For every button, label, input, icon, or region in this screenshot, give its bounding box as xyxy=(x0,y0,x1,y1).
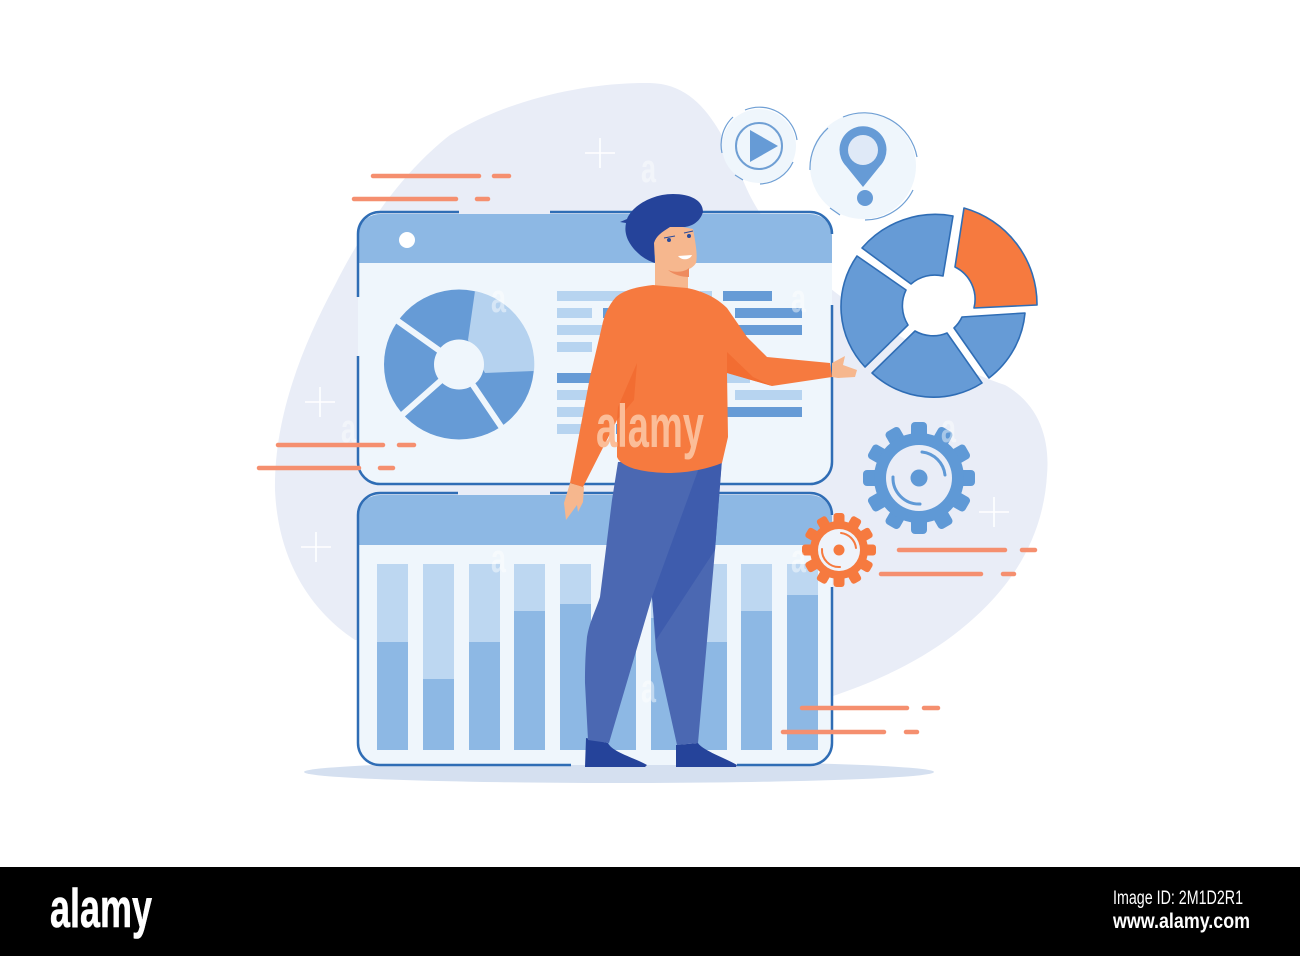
footer url: www.alamy.com xyxy=(1112,910,1250,933)
panel: upper dashboard window xyxy=(358,212,832,484)
watermark marks: a xyxy=(791,537,807,581)
segment: lower right xyxy=(954,313,1025,378)
chin shadow xyxy=(668,268,689,277)
chart: exploded donut xyxy=(841,208,1037,397)
window outline xyxy=(358,493,832,765)
left text rows xyxy=(557,291,636,434)
footer logo: alamy xyxy=(50,877,152,939)
trouser shade xyxy=(652,460,722,640)
hair xyxy=(620,194,703,263)
window body xyxy=(358,545,832,765)
watermark: centre alamy: alamy xyxy=(596,393,704,460)
watermark marks: a xyxy=(341,407,357,451)
left hand xyxy=(564,483,584,520)
ground shadow xyxy=(304,761,934,783)
segment: orange highlight xyxy=(955,208,1037,308)
footer image id: Image ID: 2M1D2R1 xyxy=(1113,888,1243,909)
icon: play button xyxy=(721,107,797,184)
watermark marks: a xyxy=(941,407,957,451)
segment: bottom xyxy=(872,331,982,397)
icon: large blue gear xyxy=(863,422,975,534)
window header xyxy=(358,495,832,545)
right hand xyxy=(832,356,857,378)
plus marks xyxy=(301,138,1009,562)
watermark marks: a xyxy=(491,537,507,581)
window dot xyxy=(399,232,415,248)
watermark marks: a xyxy=(791,277,807,321)
sweater shade xyxy=(617,352,772,420)
segment: top xyxy=(862,214,953,284)
neck xyxy=(655,255,688,290)
bar chart xyxy=(377,564,818,750)
eyes and smile xyxy=(664,231,693,259)
icon: small orange gear xyxy=(802,513,876,587)
speed lines: right xyxy=(881,550,1035,574)
right text rows xyxy=(700,291,802,417)
face xyxy=(653,225,697,272)
footer bar xyxy=(0,867,1300,956)
window body xyxy=(358,263,832,484)
watermark marks: a xyxy=(641,667,657,711)
sweater xyxy=(570,285,832,487)
segment: left xyxy=(841,256,908,367)
character: presenter xyxy=(564,194,857,767)
window header xyxy=(358,214,832,263)
speed lines: bottom right xyxy=(783,708,938,732)
watermark marks xyxy=(341,147,957,711)
shoes xyxy=(585,738,737,767)
speed lines: top left xyxy=(354,176,509,199)
window outline xyxy=(358,212,832,484)
icon: location pin xyxy=(810,113,917,220)
trousers xyxy=(585,458,722,745)
watermark marks: a xyxy=(491,277,507,321)
background blob xyxy=(275,83,1048,697)
panel: lower bar chart window xyxy=(358,493,832,765)
speed lines: left xyxy=(259,445,414,468)
watermark marks: a xyxy=(641,147,657,191)
pie chart xyxy=(384,290,534,440)
